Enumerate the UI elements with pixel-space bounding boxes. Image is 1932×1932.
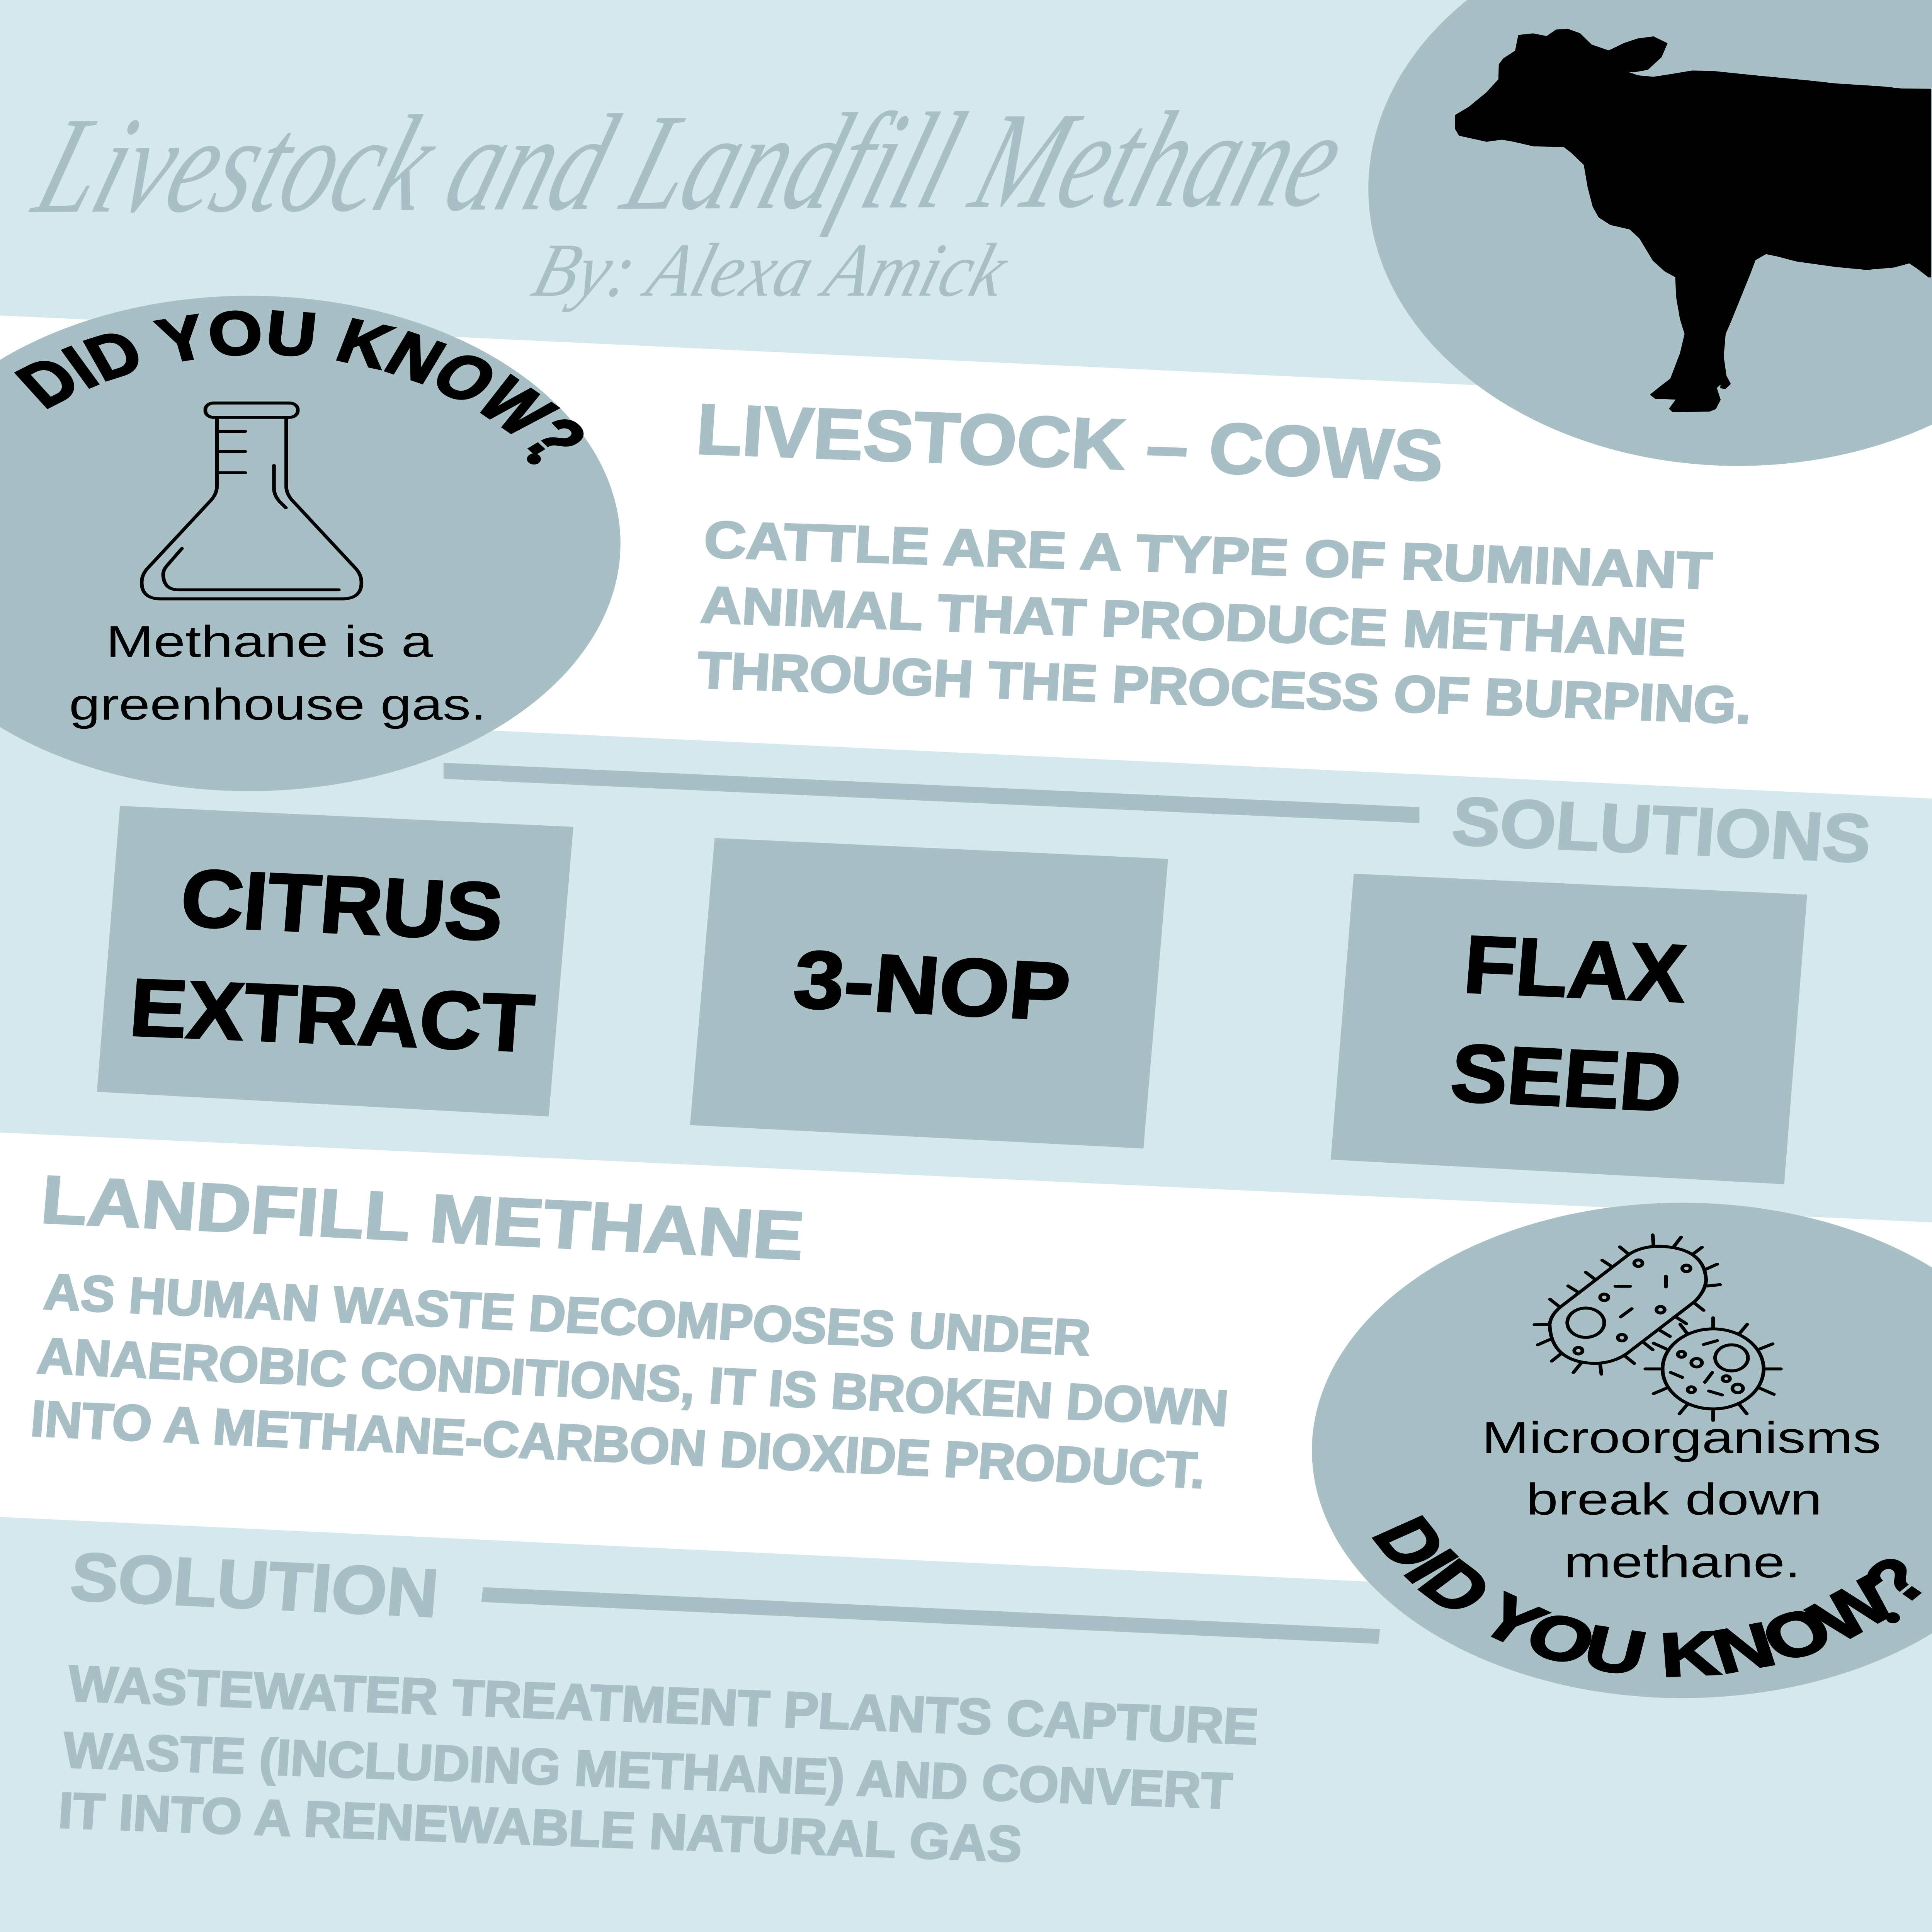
text: solution paragraph: WASTEWATER TREATMENT PLANTS CAPTURE <box>66 1655 1260 1755</box>
heading: landfill methane: LANDFILL METHANE <box>38 1161 807 1274</box>
card: flax seed: SEED <box>1447 1027 1685 1129</box>
text: solution paragraph: IT INTO A RENEWABLE NATURAL GAS <box>57 1782 1024 1872</box>
text: solution paragraph: WASTE (INCLUDING METHANE) AND CONVERT <box>62 1721 1234 1819</box>
white band: landfill section <box>0 1133 1932 1608</box>
heading: livestock cows: LIVESTOCK – COWS <box>694 389 1446 496</box>
fact text: microorganisms: Microorganisms <box>1482 1413 1881 1463</box>
divider: solution rule <box>481 1587 1380 1644</box>
text: landfill paragraph: INTO A METHANE-CARBON DIOXIDE PRODUCT. <box>29 1390 1208 1499</box>
icon: bacteria <box>1534 1235 1900 1623</box>
divider: solutions rule <box>444 763 1419 823</box>
card: citrus extract: CITRUS <box>178 852 507 957</box>
panel: did you know microorganisms <box>1312 1203 1932 1698</box>
white band: livestock section <box>0 315 1932 799</box>
byline: By: Alexa Amick <box>524 228 1018 313</box>
fact text: microorganisms: break down <box>1526 1475 1822 1524</box>
text: landfill paragraph: AS HUMAN WASTE DECOMPOSES UNDER <box>42 1263 1093 1366</box>
heading: solution: SOLUTION <box>68 1538 441 1631</box>
fact text: methane greenhouse gas: greenhouse gas. <box>69 680 486 729</box>
card: 3-NOP: 3-NOP <box>790 933 1074 1037</box>
card: flax seed <box>1331 874 1807 1184</box>
heading: did you know bottom: DID YOU KNOW? <box>1355 1506 1932 1690</box>
fact text: methane greenhouse gas <box>69 617 486 729</box>
card: citrus extract <box>97 806 573 1116</box>
icon: cow silhouette <box>1456 29 1931 412</box>
fact text: microorganisms <box>1482 1413 1881 1587</box>
icon: flask <box>142 403 541 599</box>
cow circle <box>1368 0 1932 466</box>
panel: did you know methane <box>0 296 621 791</box>
text: landfill paragraph <box>29 1263 1230 1499</box>
fact text: microorganisms: methane. <box>1564 1537 1801 1587</box>
card: citrus extract: EXTRACT <box>127 961 537 1069</box>
text: cattle paragraph: CATTLE ARE A TYPE OF RUMINANT <box>702 510 1714 600</box>
text: landfill paragraph: ANAEROBIC CONDITIONS, IT IS BROKEN DOWN <box>35 1327 1230 1437</box>
card: 3-NOP <box>690 838 1168 1148</box>
fact text: methane greenhouse gas: Methane is a <box>106 617 433 666</box>
text: solution paragraph <box>57 1655 1260 1872</box>
text: cattle paragraph <box>696 510 1753 735</box>
card: flax seed: FLAX <box>1461 918 1689 1019</box>
text: cattle paragraph: ANIMAL THAT PRODUCE METHANE <box>699 576 1687 667</box>
heading: did you know top: DID YOU KNOW? <box>2 298 604 473</box>
